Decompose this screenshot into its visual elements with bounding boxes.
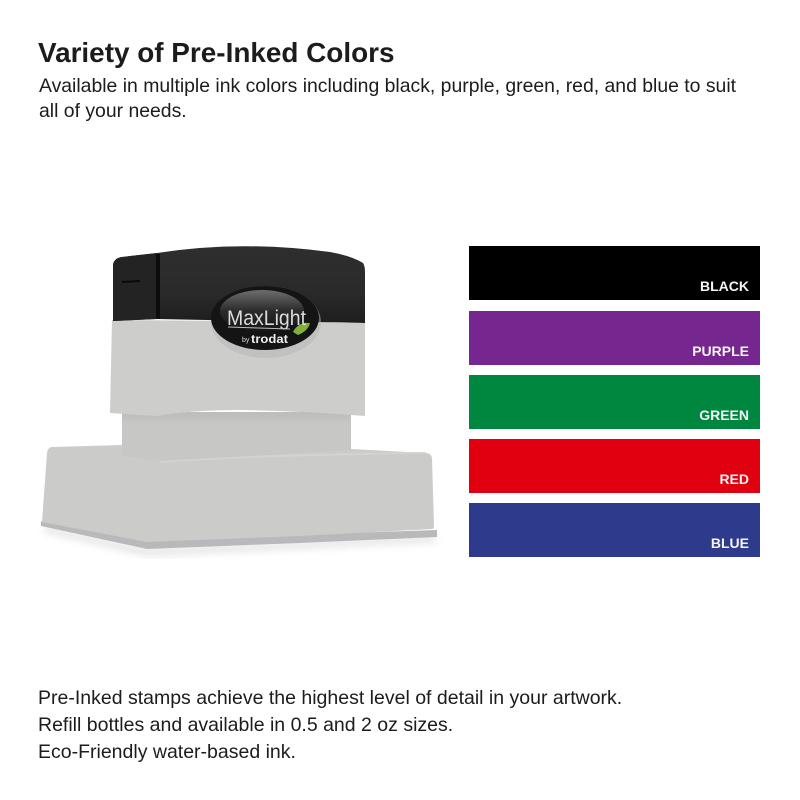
bottom text: Pre-Inked stamps achieve the highest level of detail in your artwork. [38, 687, 622, 709]
intro text: Available in multiple ink colors including black, purple, green, red, and blue to suit [39, 75, 736, 97]
title: Variety of Pre-Inked Colors [38, 37, 394, 68]
stamp black cap [113, 246, 365, 323]
swatch: black: BLACK [700, 278, 749, 294]
bottom text [38, 687, 622, 763]
base shadow [44, 526, 436, 556]
logo badge: by [242, 337, 250, 344]
swatch: blue: BLUE [711, 535, 749, 551]
stamp base [41, 445, 437, 549]
swatch: green [469, 375, 760, 429]
bottom text: Refill bottles and available in 0.5 and 2 oz sizes. [38, 714, 453, 736]
intro text [39, 75, 736, 122]
logo badge: trodat [251, 332, 288, 346]
stamp neck [122, 412, 351, 461]
intro text: all of your needs. [39, 100, 187, 122]
swatch: purple [469, 311, 760, 365]
stamp body [110, 320, 365, 416]
logo badge [211, 286, 321, 358]
logo badge: MaxLight [227, 307, 306, 330]
swatch: black [469, 246, 760, 300]
swatch: purple: PURPLE [692, 343, 749, 359]
swatch: red: RED [719, 471, 749, 487]
swatch: blue [469, 503, 760, 557]
bottom text: Eco-Friendly water-based ink. [38, 741, 296, 763]
swatch: green: GREEN [699, 407, 749, 423]
swatch: red [469, 439, 760, 493]
